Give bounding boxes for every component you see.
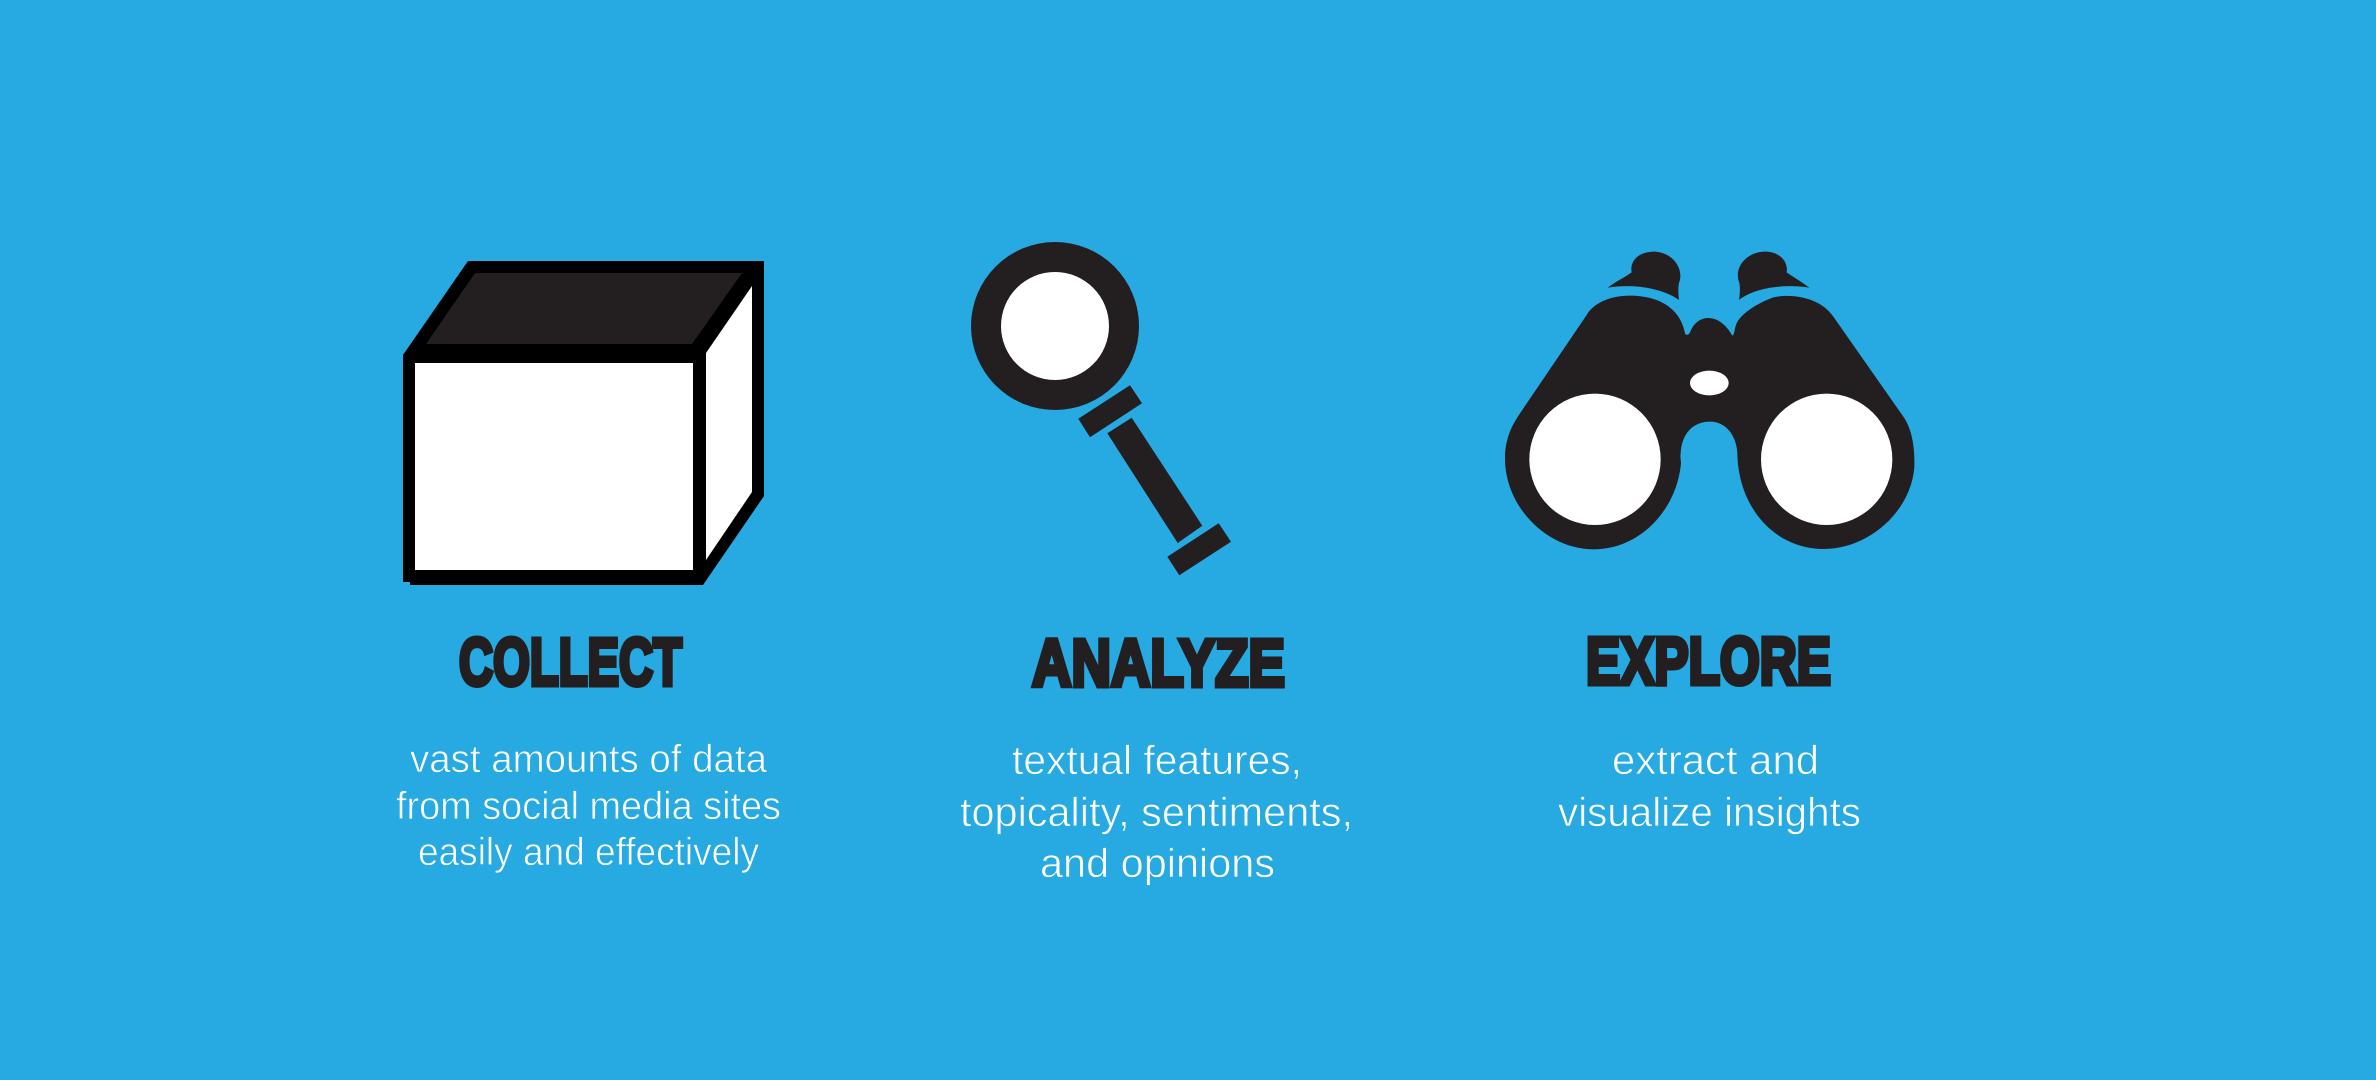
panel: collect (396, 261, 781, 874)
icon: magnifying glass (971, 242, 1231, 575)
description: explore: extract and (1612, 737, 1819, 783)
panel: explore (1505, 252, 1914, 835)
heading: explore: EXPLORE (1586, 624, 1831, 699)
description: collect: vast amounts of data (410, 738, 767, 781)
panel: analyze (960, 242, 1353, 886)
icon: binoculars (1505, 252, 1914, 549)
description: collect: easily and effectively (418, 831, 759, 874)
description: analyze (960, 737, 1353, 886)
heading: collect: COLLECT (459, 625, 682, 700)
description: explore: visualize insights (1558, 789, 1861, 835)
description: analyze: topicality, sentiments, (960, 789, 1353, 835)
heading: analyze: ANALYZE (1032, 626, 1285, 701)
icon: box (403, 261, 764, 585)
description: explore (1558, 737, 1861, 835)
description: analyze: and opinions (1040, 840, 1275, 886)
description: collect (396, 738, 781, 874)
description: collect: from social media sites (396, 785, 781, 828)
description: analyze: textual features, (1012, 737, 1302, 783)
